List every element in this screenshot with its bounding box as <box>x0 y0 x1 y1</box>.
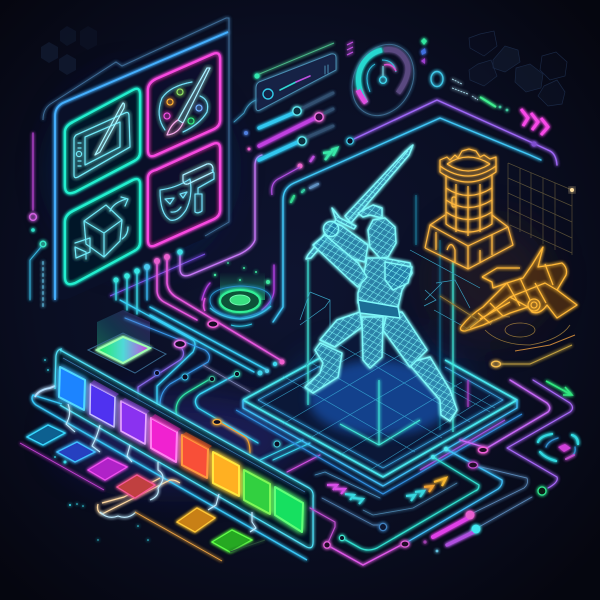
platform centre glow <box>308 360 452 436</box>
tower base <box>425 215 513 269</box>
ship panel lines <box>470 264 557 328</box>
panel outer frame <box>43 18 229 300</box>
tower shaft <box>446 175 492 236</box>
panel backing <box>55 30 228 300</box>
circuit frame around hero <box>273 100 557 322</box>
platform <box>236 195 522 494</box>
light rising from cube <box>97 310 150 363</box>
back arm <box>325 222 368 262</box>
tool card: palette <box>148 53 220 156</box>
circuits from panel <box>116 155 320 472</box>
helmet <box>368 218 396 258</box>
chevrons on circuit floor <box>327 478 446 504</box>
wireframe scaffolding <box>300 250 480 366</box>
left vertical pink connector <box>30 133 36 232</box>
palette bar <box>20 349 313 561</box>
panel: tool display <box>43 18 229 300</box>
bar frame <box>32 349 313 560</box>
slider pair lower right <box>423 511 480 552</box>
swatches <box>59 367 303 532</box>
platform grid <box>260 340 495 470</box>
thumbnails <box>27 425 252 552</box>
status icons and readout <box>421 38 508 111</box>
cube top <box>97 337 150 363</box>
cube tray <box>88 333 166 373</box>
tower wireframe <box>425 149 513 269</box>
sliders <box>234 93 333 160</box>
left cyan connector <box>30 241 46 310</box>
tower door slit <box>452 197 456 207</box>
thumbnail rails <box>20 443 265 561</box>
platform base <box>243 325 517 477</box>
swatch side highlights <box>90 380 212 449</box>
orange connector <box>440 296 572 367</box>
front arm <box>313 235 367 287</box>
tower crown <box>440 149 496 182</box>
left shin and foot <box>305 343 342 393</box>
platform verticals <box>308 195 468 445</box>
tool card: cube <box>65 179 140 284</box>
lightning arcs <box>66 404 256 532</box>
spaceship wireframe <box>460 247 577 331</box>
sliders panel <box>234 43 336 160</box>
lower right circuits <box>310 380 572 565</box>
sword <box>306 145 413 259</box>
upper circuit nodes <box>272 138 537 195</box>
torso <box>358 258 412 310</box>
hexagon pattern top left <box>41 26 97 75</box>
ship hull <box>460 247 577 331</box>
lower right nodes <box>324 447 546 548</box>
hexagon pattern top right <box>469 31 567 106</box>
ship wing <box>482 268 520 288</box>
loincloth <box>362 317 383 368</box>
right shin and foot <box>408 357 457 421</box>
pauldron <box>385 262 412 290</box>
sparks <box>44 359 149 541</box>
top lead line <box>254 43 334 79</box>
background grid behind tower <box>508 163 572 255</box>
circuit nodes <box>113 249 285 447</box>
left thigh <box>320 312 362 347</box>
green podium <box>204 262 271 326</box>
readout card <box>256 54 336 111</box>
tool card: tablet <box>65 89 140 193</box>
chromatic cube <box>88 310 166 373</box>
platform outline <box>236 358 522 494</box>
ambient glows <box>55 80 550 485</box>
tool card: mask and roller <box>148 143 220 246</box>
belt <box>358 300 400 318</box>
small dashes left of hero <box>291 184 318 202</box>
sliders left of panel <box>30 133 46 310</box>
magenta chevrons top right <box>521 109 548 135</box>
green arrow top right of circuits <box>546 381 572 395</box>
target icon <box>538 434 578 461</box>
podium rings <box>204 286 271 326</box>
knight hologram <box>305 145 457 421</box>
right thigh <box>383 312 427 367</box>
gauge <box>340 34 426 126</box>
grid corner light <box>570 188 574 192</box>
ponytail <box>358 205 382 218</box>
small chevrons beside hero <box>310 148 337 162</box>
light column <box>220 272 265 300</box>
hands <box>324 222 338 236</box>
rings under ship <box>485 317 575 351</box>
